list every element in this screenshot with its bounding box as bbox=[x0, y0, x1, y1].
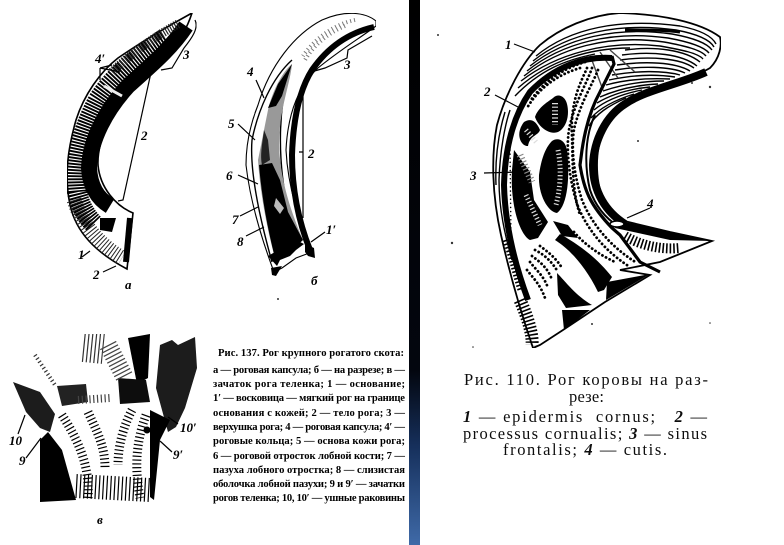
specks bbox=[277, 34, 711, 348]
caption: fig. 137: оболочка лобной пазухи; 9 и 9′ — зачатки bbox=[213, 479, 405, 490]
caption: fig. 137 bbox=[213, 348, 405, 504]
horn b outer shell bbox=[246, 13, 376, 272]
horn b labels and brackets: 1′ bbox=[326, 222, 336, 237]
horn b labels and brackets: 3 bbox=[343, 57, 351, 72]
horn a labels and brackets: 2 bbox=[92, 267, 100, 282]
horn labels bbox=[469, 37, 654, 218]
caption: fig. 137: верхушка рога; 4 — роговая капсула; 4′ — bbox=[213, 422, 405, 433]
horn b labels and brackets: 8 bbox=[237, 234, 244, 249]
calf head labels: 10′ bbox=[180, 420, 197, 435]
horn a labels and brackets: 2 bbox=[140, 128, 148, 143]
horn a labels and brackets: 4′ bbox=[94, 51, 106, 66]
panel: horn capsule a bbox=[67, 13, 196, 292]
caption: fig. 110: Рис. 110. Рог коровы на раз- bbox=[464, 370, 708, 389]
caption: fig. 137: рогов теленка; 10, 10′ — ушные раковины bbox=[213, 493, 405, 504]
inner rim bbox=[593, 72, 706, 224]
horn b labels and brackets: 7 bbox=[232, 212, 239, 227]
caption: fig. 137: пазуха лобного отростка; 8 — слизистая bbox=[213, 465, 405, 476]
caption: fig. 137: зачаток рога теленка; 1 — основание; bbox=[213, 379, 405, 390]
horn labels: 3 bbox=[469, 168, 477, 183]
spongy bone dots bbox=[510, 62, 637, 298]
horn a labels and brackets: а bbox=[125, 277, 132, 292]
calf head labels: 9′ bbox=[173, 447, 184, 462]
horn a outline bbox=[67, 13, 192, 269]
panel: calf horn buds bbox=[9, 334, 197, 527]
horn b labels and brackets: 6 bbox=[226, 168, 233, 183]
caption: fig. 137: Рис. 137. Рог крупного рогатого скота: bbox=[218, 348, 404, 359]
cavity hatching bbox=[520, 103, 560, 225]
caption: fig. 137: а — роговая капсула; б — на разрезе; в — bbox=[213, 365, 405, 376]
calf head labels: 9 bbox=[19, 453, 26, 468]
calf head labels: 10 bbox=[9, 433, 22, 448]
horn b labels and brackets: 4 bbox=[246, 64, 254, 79]
caption: fig. 110: frontalis; 4 — cutis. bbox=[503, 440, 667, 459]
caption: fig. 137: 6 — роговой отросток лобной кости; 7 — bbox=[213, 451, 405, 462]
keratin lines bbox=[496, 23, 716, 260]
horn b labels and brackets bbox=[226, 36, 372, 288]
horn b base bbox=[268, 240, 304, 266]
caption: fig. 137: роговые кольца; 5 — основа кожи рога; bbox=[213, 436, 405, 447]
panel: cow horn cross-section bbox=[469, 13, 721, 348]
caption: fig. 110: processus cornualis; 3 — sinus bbox=[463, 424, 707, 443]
vertical divider bar bbox=[409, 0, 420, 545]
panel: horn section b bbox=[226, 13, 376, 288]
horn b core cavity bbox=[258, 64, 303, 258]
cutis and base hatching bbox=[505, 236, 680, 345]
horn b labels and brackets: 5 bbox=[228, 116, 235, 131]
caption: fig. 110: резе: bbox=[569, 387, 604, 406]
calf head hatching bbox=[35, 340, 150, 498]
horn silhouette bbox=[493, 13, 721, 348]
horn a labels and brackets: 3 bbox=[182, 47, 190, 62]
horn b labels and brackets: 2 bbox=[307, 146, 315, 161]
caption: fig. 137: 1′ — восковица — мягкий рог на границе bbox=[213, 393, 405, 404]
horn labels: 4 bbox=[646, 196, 654, 211]
calf head labels: в bbox=[97, 512, 103, 527]
horn labels: 1 bbox=[505, 37, 512, 52]
horn labels: 2 bbox=[483, 84, 491, 99]
dark outer rim of bone bbox=[504, 58, 612, 300]
caption: fig. 110 bbox=[463, 370, 708, 459]
horn b labels and brackets: б bbox=[311, 273, 318, 288]
horn b dark inner edge bbox=[292, 27, 374, 250]
sinus cavities bbox=[512, 96, 712, 330]
caption: fig. 137: основания с кожей; 2 — тело рога; 3 — bbox=[213, 408, 405, 419]
caption: fig. 110: 1 — epidermis cornus; 2 — bbox=[463, 407, 708, 426]
horn a labels and brackets: 1 bbox=[78, 247, 84, 262]
horn a shading bbox=[89, 26, 186, 206]
calf head labels bbox=[9, 415, 197, 527]
calf head texture bbox=[13, 334, 197, 502]
horn a labels and brackets bbox=[78, 20, 196, 292]
